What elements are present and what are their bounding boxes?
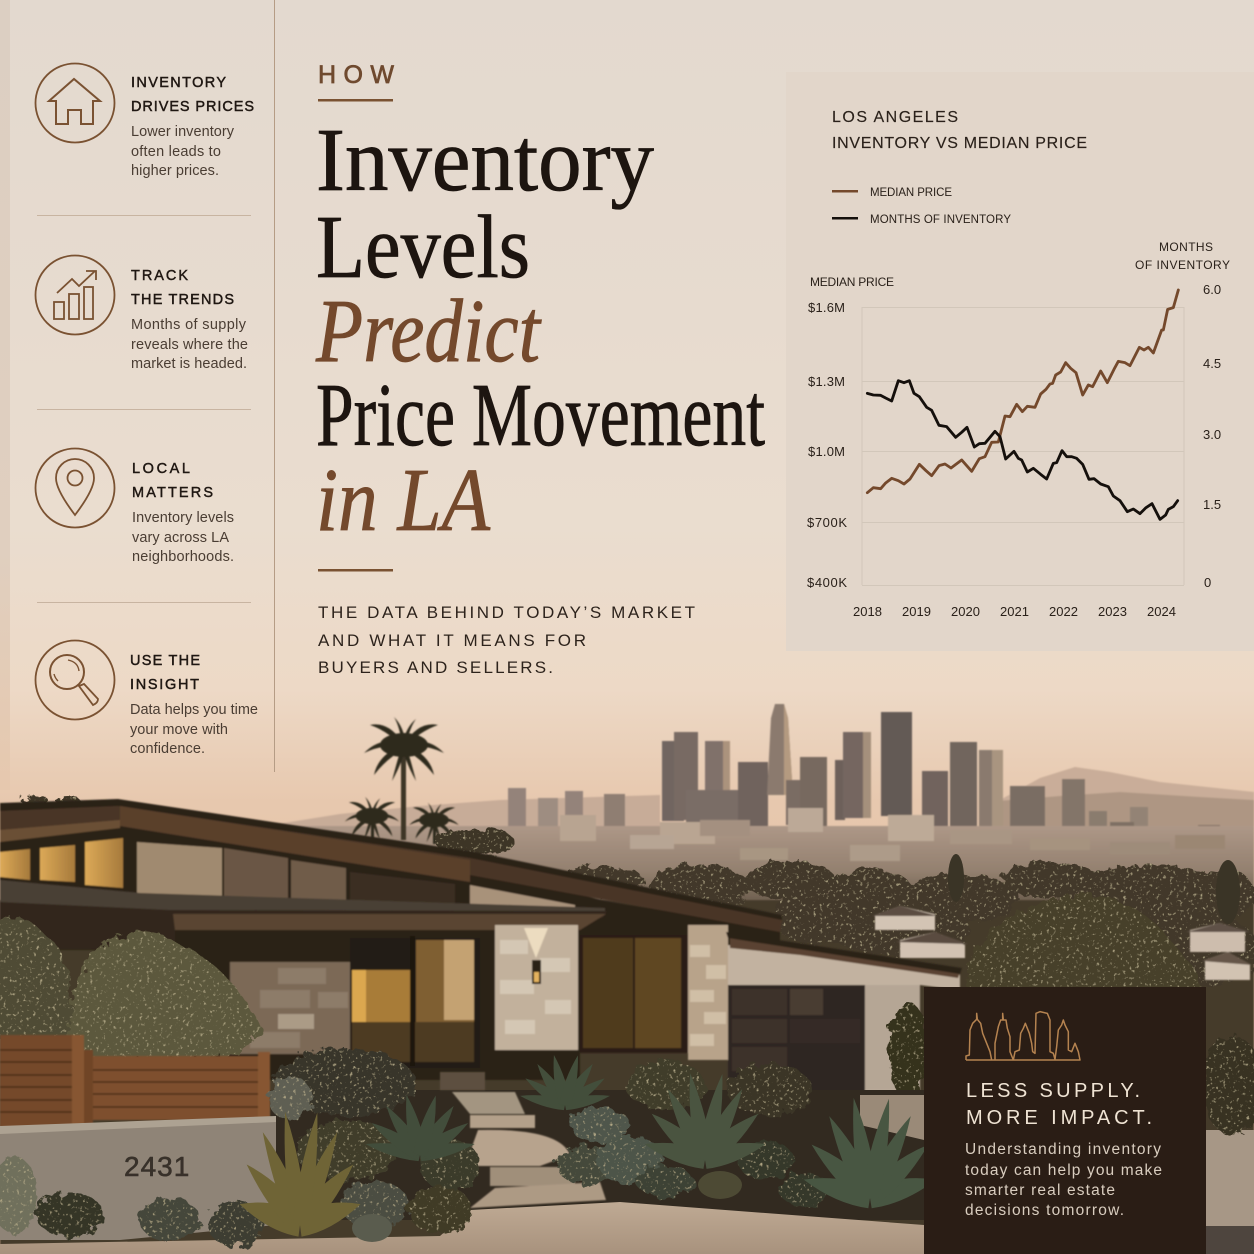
right axis: 3.0 xyxy=(1203,427,1221,442)
right axis: 6.0 xyxy=(1203,282,1221,297)
callout heading: LESS SUPPLY. xyxy=(966,1080,1140,1102)
cypress trees xyxy=(948,854,1240,924)
legend: MONTHS OF INVENTORY xyxy=(870,214,1011,226)
sidebar item: local matters: MATTERS xyxy=(132,485,213,501)
main heading: Inventory xyxy=(316,111,654,210)
sidebar item: use the insight: your move with xyxy=(130,722,228,738)
sidebar item: use the insight: INSIGHT xyxy=(130,677,199,693)
subtitle: BUYERS AND SELLERS. xyxy=(318,658,553,677)
sidebar item: use the insight xyxy=(36,640,258,757)
sidebar item: inventory drives prices: higher prices. xyxy=(131,163,219,179)
glass door xyxy=(350,938,480,1068)
year axis: 2018 xyxy=(853,604,882,619)
sidebar item: inventory drives prices: DRIVES PRICES xyxy=(131,99,254,115)
sidebar item: local matters: Inventory levels xyxy=(132,510,234,526)
street right side xyxy=(1202,1035,1254,1254)
garage wall xyxy=(728,945,960,1100)
icon: house xyxy=(36,64,114,142)
panel: chart xyxy=(786,72,1254,651)
gridlines xyxy=(862,307,1184,586)
garage roof xyxy=(730,936,960,978)
concrete wall with address: 2431 xyxy=(124,1151,190,1182)
icon: map pin xyxy=(36,448,114,528)
stone pillar xyxy=(495,925,578,1050)
house upper wall xyxy=(0,808,780,950)
left axis: $700K xyxy=(807,515,847,530)
downtown LA skyline xyxy=(508,704,1220,841)
year axis: 2022 xyxy=(1049,604,1078,619)
trees behind roof xyxy=(21,796,515,856)
sidewalk xyxy=(0,1202,924,1254)
median price line xyxy=(867,290,1178,493)
callout body: smarter real estate xyxy=(965,1182,1115,1199)
chart title: INVENTORY VS MEDIAN PRICE xyxy=(832,135,1087,152)
clerestory stone windows xyxy=(137,842,575,925)
subtitle: AND WHAT IT MEANS FOR xyxy=(318,631,586,650)
callout heading xyxy=(966,1080,1152,1129)
callout body: today can help you make xyxy=(965,1162,1162,1179)
subtitle: THE DATA BEHIND TODAY’S MARKET xyxy=(318,603,695,622)
sidebar item: local matters xyxy=(36,448,234,565)
year axis: 2019 xyxy=(902,604,931,619)
right axis: 0 xyxy=(1204,575,1211,590)
right axis xyxy=(1203,282,1221,590)
year axis: 2024 xyxy=(1147,604,1176,619)
sidebar item: use the insight: Data helps you time xyxy=(130,702,258,718)
sidebar item: track the trends: reveals where the xyxy=(131,337,248,353)
left axis: $1.3M xyxy=(808,374,845,389)
city low rise band xyxy=(0,808,1254,1254)
eyebrow: how: HOW xyxy=(318,61,394,89)
main roof fascia xyxy=(0,802,782,932)
sidebar item: inventory drives prices xyxy=(36,64,254,179)
callout body: Understanding inventory xyxy=(965,1141,1161,1158)
ground and beds xyxy=(270,1090,930,1220)
landscaping shrubs and agaves xyxy=(0,1048,938,1246)
callout heading: MORE IMPACT. xyxy=(966,1107,1152,1129)
icon: skyline outline xyxy=(966,1012,1080,1060)
callout body xyxy=(965,1141,1162,1219)
sidebar item: track the trends: TRACK xyxy=(131,268,188,284)
axis titles: MEDIAN PRICE xyxy=(810,275,894,289)
sidebar item: track the trends: Months of supply xyxy=(131,317,247,333)
main heading: Price Movement xyxy=(316,366,765,465)
axis titles: OF INVENTORY xyxy=(1135,258,1230,272)
shrub by garage xyxy=(888,1002,928,1098)
sidebar item: inventory drives prices: INVENTORY xyxy=(131,75,226,91)
chart title: LOS ANGELES xyxy=(832,109,958,126)
sidebar item: track the trends: THE TRENDS xyxy=(131,292,234,308)
sidebar item: local matters: vary across LA xyxy=(132,530,229,546)
wood fence xyxy=(0,1035,270,1127)
months of inventory line xyxy=(867,381,1178,519)
sidebar item: inventory drives prices: Lower inventory xyxy=(131,124,235,140)
chart title xyxy=(832,109,1087,152)
icon: magnifying glass xyxy=(36,640,114,720)
main heading: Predict xyxy=(315,282,542,381)
main heading xyxy=(315,111,765,550)
entry wall xyxy=(100,950,580,1080)
large tree behind callout xyxy=(967,895,1205,1000)
legend xyxy=(832,187,1011,226)
main heading: in LA xyxy=(316,451,491,550)
icon: rising bars xyxy=(36,256,114,334)
garage door xyxy=(728,985,865,1100)
house xyxy=(0,799,962,1100)
concrete wall with address xyxy=(0,1116,276,1240)
right axis: 1.5 xyxy=(1203,497,1221,512)
year axis: 2020 xyxy=(951,604,980,619)
photo backdrop: distant landscape xyxy=(0,704,1254,1254)
main heading: Levels xyxy=(316,198,530,297)
stone corner xyxy=(688,925,728,1060)
trees in the valley xyxy=(555,860,1254,990)
olive trees xyxy=(0,917,262,1060)
right axis: 4.5 xyxy=(1203,356,1221,371)
neighborhood houses xyxy=(872,906,1252,980)
axis titles xyxy=(810,240,1230,289)
sidebar item: track the trends xyxy=(36,256,248,372)
year axis: 2021 xyxy=(1000,604,1029,619)
callout panel xyxy=(924,987,1206,1254)
callout body: decisions tomorrow. xyxy=(965,1202,1124,1219)
left axis: $400K xyxy=(807,575,847,590)
front steps xyxy=(440,1072,606,1208)
year axis xyxy=(853,604,1176,619)
stone wall left xyxy=(230,962,350,1054)
title block xyxy=(315,61,765,677)
sidebar divider xyxy=(274,0,275,772)
palm trees xyxy=(345,717,459,844)
left axis xyxy=(807,300,847,590)
sidebar item: inventory drives prices: often leads to xyxy=(131,144,221,160)
lower roof xyxy=(0,880,605,916)
axis titles: MONTHS xyxy=(1159,240,1213,254)
large window xyxy=(580,935,688,1053)
sidebar item: use the insight: USE THE xyxy=(130,653,200,669)
sidebar item: use the insight: confidence. xyxy=(130,741,205,757)
subtitle xyxy=(318,603,695,677)
sidebar item: local matters: neighborhoods. xyxy=(132,549,234,565)
glowing upper windows xyxy=(0,838,123,888)
distant hills xyxy=(265,767,1254,850)
left axis: $1.6M xyxy=(808,300,845,315)
sidebar item: track the trends: market is headed. xyxy=(131,356,247,372)
left axis: $1.0M xyxy=(808,444,845,459)
sidebar item: local matters: LOCAL xyxy=(132,461,190,477)
legend: MEDIAN PRICE xyxy=(870,187,952,199)
year axis: 2023 xyxy=(1098,604,1127,619)
